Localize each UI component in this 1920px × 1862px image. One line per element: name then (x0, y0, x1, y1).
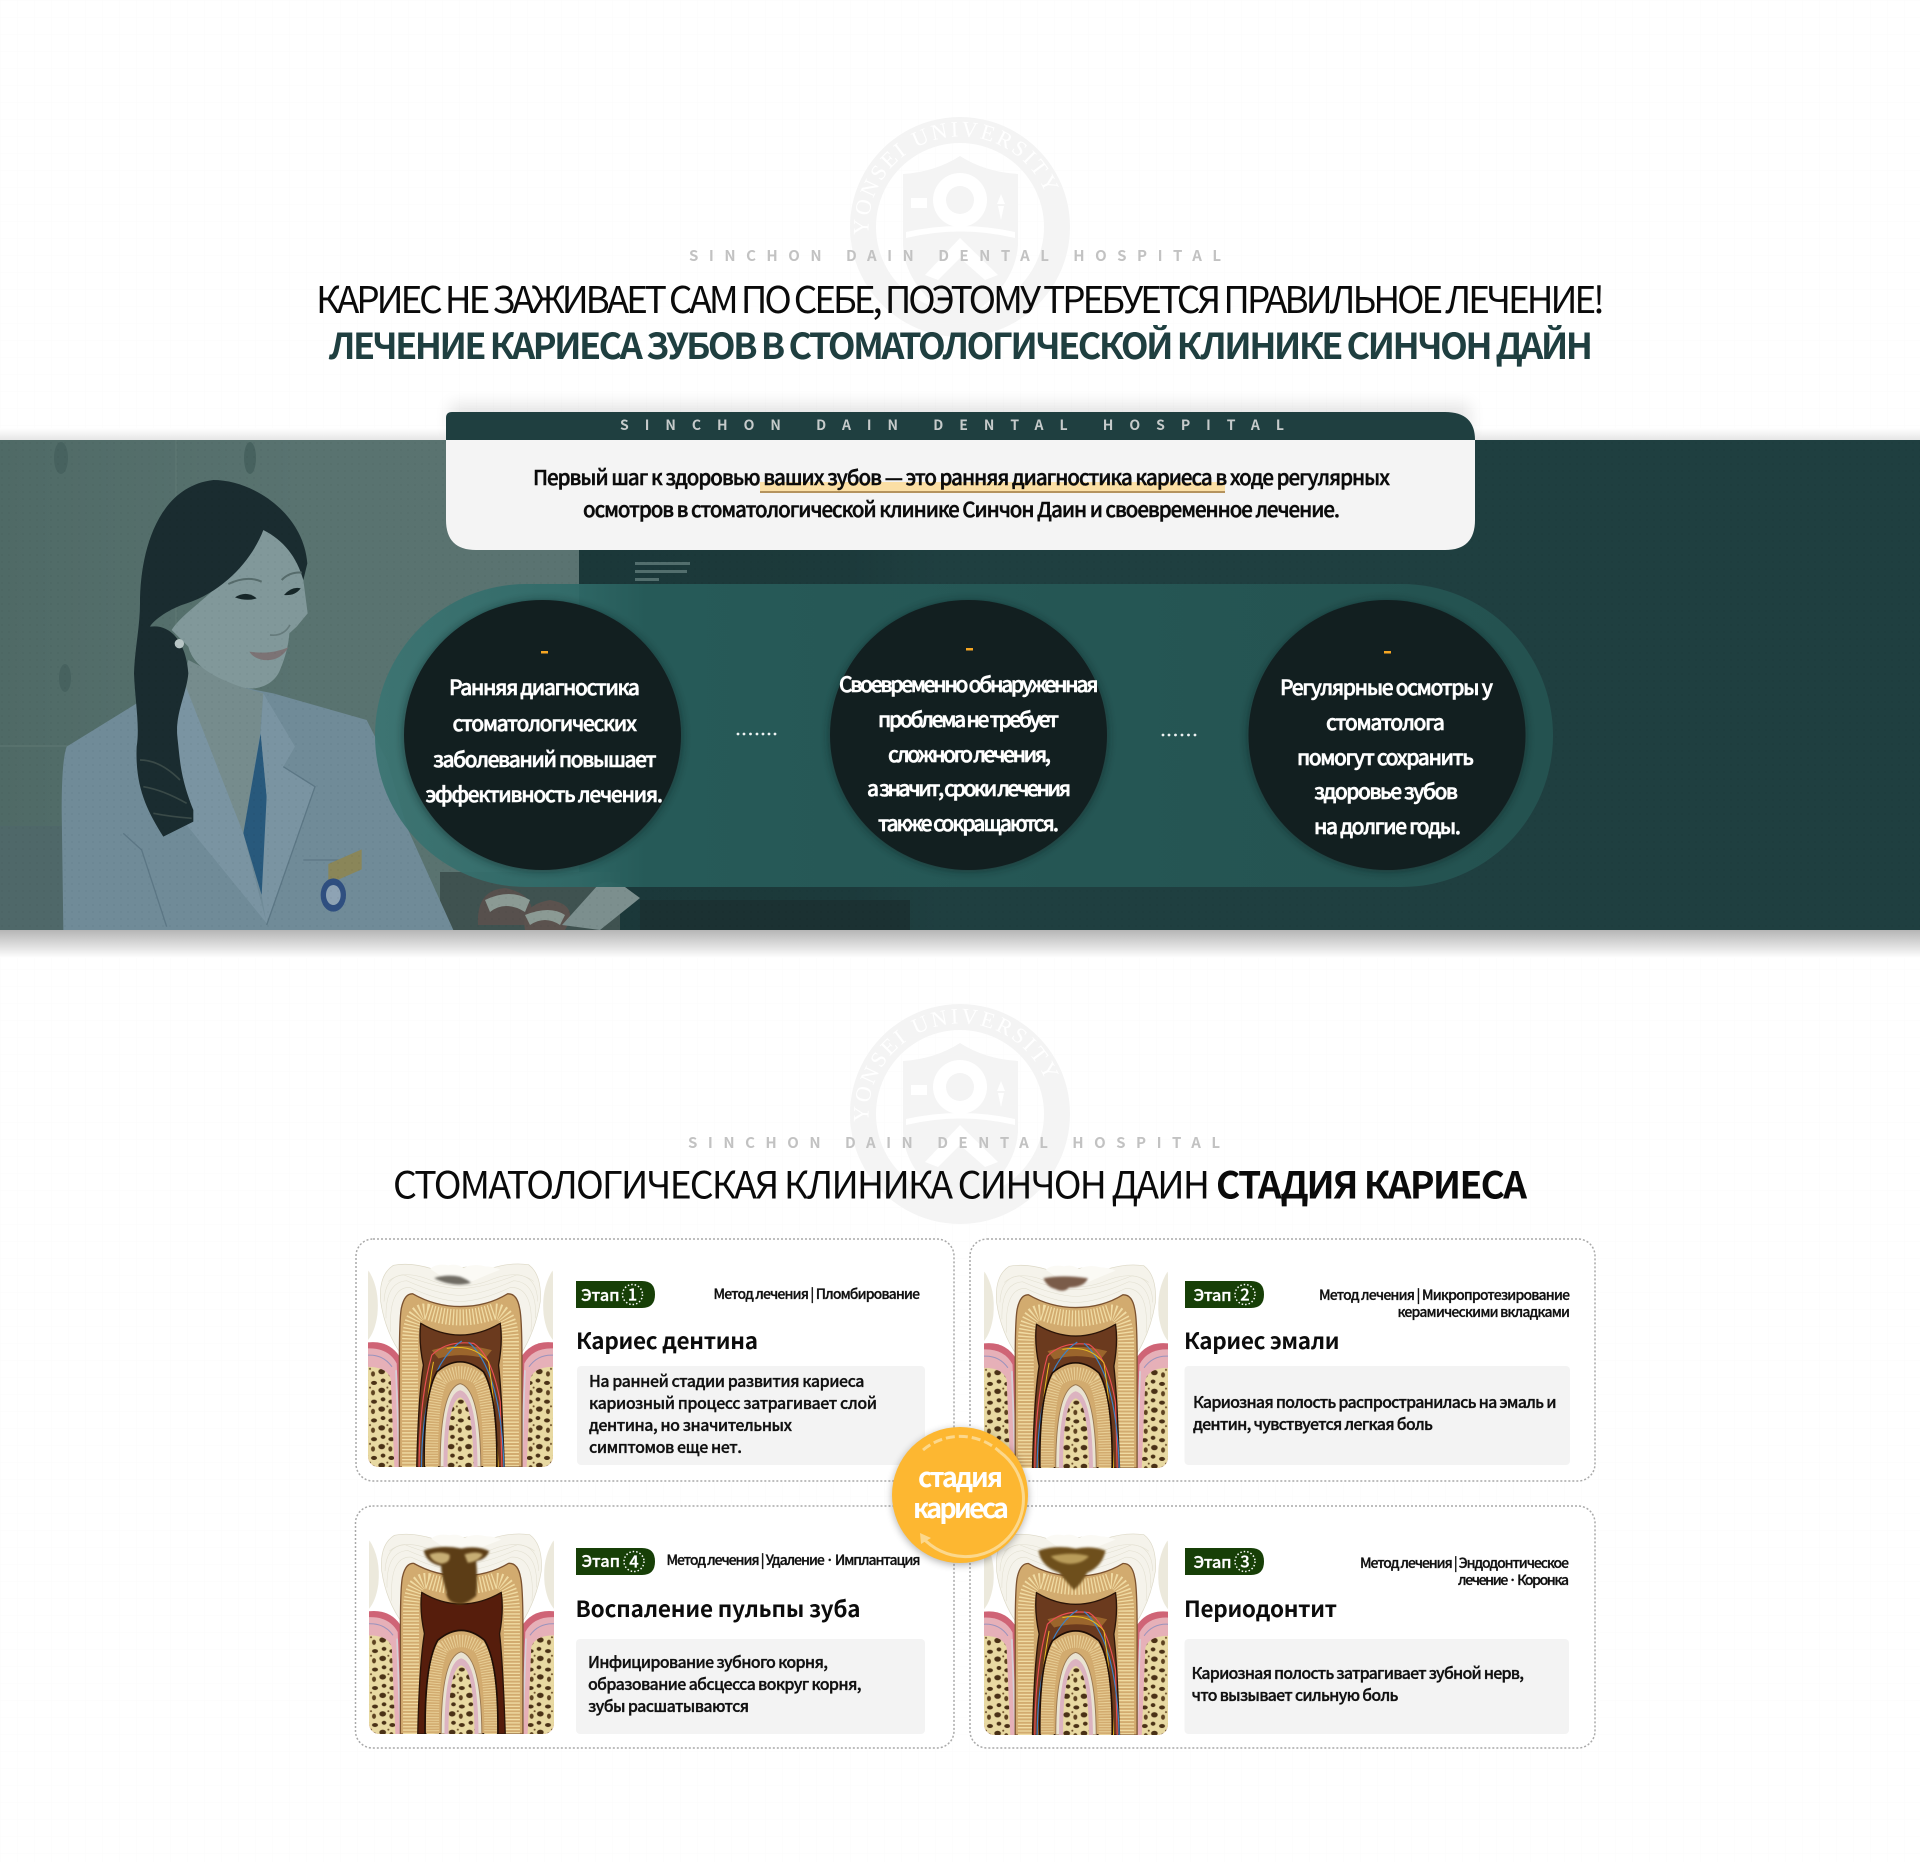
stage heading: Кариес дентина (576, 1324, 758, 1356)
tooth illustration stage 3 (984, 1534, 1168, 1735)
circle three: стоматолога (1326, 707, 1445, 737)
treatment method: Метод лечения | Эндодонтическое (1360, 1553, 1569, 1573)
stage badge: 1 (628, 1282, 637, 1306)
facial features (175, 573, 302, 660)
panel: stage 2 card (970, 1239, 1595, 1481)
treatment method: Метод лечения | Удаление · Имплантация (666, 1550, 920, 1570)
card text line two: осмотров в стоматологической клинике Синчон Даин и своевременное лечение. (583, 493, 1340, 523)
description (1184, 1639, 1569, 1734)
photo: monitor and desk (440, 548, 939, 930)
circle two: Своевременно обнаруженная (839, 669, 1098, 699)
banner shadows (0, 428, 1920, 958)
badge text: стадия (918, 1456, 1003, 1495)
watermark emblem: bottom (850, 1004, 1070, 1224)
section title: СТАДИЯ КАРИЕСА (1216, 1156, 1527, 1210)
stage badge: Этап (582, 1548, 620, 1572)
circle one: стоматологических (452, 708, 637, 738)
circle three (1247, 600, 1527, 872)
dotted connector two (1162, 734, 1196, 736)
tooth illustration stage 2 (984, 1264, 1168, 1468)
watermark emblem: top: YONSEI UNIVERSITY (854, 122, 1058, 234)
description: что вызывает сильную боль (1192, 1682, 1399, 1706)
treatment method: керамическими вкладками (1398, 1302, 1570, 1322)
lab coat (62, 677, 453, 930)
circle three: Регулярные осмотры у (1280, 672, 1494, 702)
circle one: эффективность лечения. (426, 779, 663, 809)
dotted connector one (737, 733, 776, 735)
badge text (913, 1456, 1009, 1526)
panel: intro card (446, 404, 1475, 550)
description (1184, 1366, 1570, 1465)
circle two: а значит, сроки лечения (867, 773, 1071, 803)
circle two: проблема не требует (878, 704, 1059, 734)
treatment method (1360, 1553, 1569, 1590)
circle two (828, 600, 1108, 872)
card header label: SINCHON DAIN DENTAL HOSPITAL (620, 415, 1284, 435)
tooth illustration stage 4 (369, 1534, 554, 1734)
circle one: Ранняя диагностика (449, 672, 640, 702)
description: дентина, но значительных (589, 1412, 793, 1436)
title: first line: КАРИЕС НЕ ЗАЖИВАЕТ САМ ПО СЕБЕ, ПОЭТОМУ ТРЕБУЕТСЯ ПРАВИЛЬНОЕ ЛЕЧЕНИЕ! (316, 270, 1605, 324)
photo: doctor (62, 480, 453, 930)
skin at neckline (180, 660, 263, 833)
panel: capsule behind circles (375, 584, 1553, 887)
description: Кариозная полость распространилась на эмаль и (1193, 1389, 1556, 1413)
circle two: сложного лечения, (888, 739, 1051, 769)
treatment method (1319, 1285, 1570, 1322)
circle three: на долгие годы. (1314, 811, 1461, 841)
watermark label: top: SINCHON DAIN DENTAL HOSPITAL (689, 245, 1221, 266)
watermark label: bottom: SINCHON DAIN DENTAL HOSPITAL (688, 1132, 1220, 1153)
stage badge (1185, 1281, 1264, 1308)
stage badge: Этап (581, 1282, 620, 1306)
name tag and logo (321, 849, 362, 912)
panel: stage 1 card (356, 1239, 954, 1481)
section title: СТОМАТОЛОГИЧЕСКАЯ КЛИНИКА СИНЧОН ДАИН (393, 1154, 1210, 1210)
stage badge (576, 1548, 655, 1575)
treatment method: Метод лечения | Пломбирование (714, 1284, 920, 1304)
face (172, 530, 308, 689)
panel: stage 3 card (970, 1506, 1595, 1748)
description: симптомов еще нет. (589, 1434, 742, 1458)
badge ring arrow (920, 1436, 1023, 1557)
circle one (402, 600, 682, 872)
description: Кариозная полость затрагивает зубной нерв, (1192, 1660, 1524, 1684)
description: зубы расшатываются (588, 1693, 749, 1717)
stage badge (1185, 1548, 1264, 1575)
description (577, 1366, 925, 1465)
treatment method: Метод лечения | Микропротезирование (1319, 1285, 1570, 1305)
stage heading: Кариес эмали (1184, 1324, 1340, 1356)
stage badge (576, 1281, 655, 1308)
stage heading: Воспаление пульпы зуба (576, 1592, 860, 1624)
treatment method: лечение · Коронка (1458, 1570, 1569, 1590)
circle one: заболеваний повышает (433, 744, 656, 774)
description: кариозный процесс затрагивает слой (589, 1390, 877, 1414)
circle three: помогут сохранить (1297, 742, 1474, 772)
photo: clinic wall (0, 440, 600, 930)
panel: stage 4 card (356, 1506, 954, 1748)
stage badge: Этап (1194, 1282, 1232, 1306)
badge text: кариеса (913, 1487, 1009, 1526)
description: образование абсцесса вокруг корня, (588, 1671, 862, 1695)
stage heading: Периодонтит (1184, 1592, 1337, 1624)
stage badge: Этап (1194, 1549, 1232, 1573)
description: На ранней стадии развития кариеса (589, 1368, 864, 1392)
hair (134, 480, 307, 837)
circle two: также сокращаются. (878, 808, 1059, 838)
tooth illustration stage 1 (368, 1264, 553, 1467)
stage badge: 4 (629, 1548, 639, 1572)
coat lapels (177, 688, 314, 922)
highlight under text (760, 482, 1225, 493)
center badge: stages of caries (892, 1427, 1028, 1565)
title: second line: ЛЕЧЕНИЕ КАРИЕСА ЗУБОВ В СТОМАТОЛОГИЧЕСКОЙ КЛИНИКЕ СИНЧОН ДАЙН (328, 318, 1593, 370)
stage badge: 2 (1240, 1282, 1250, 1306)
watermark emblem: top (850, 117, 1070, 336)
band texture (0, 440, 1920, 930)
description: Инфицирование зубного корня, (588, 1649, 828, 1673)
watermark emblem: bottom: YONSEI UNIVERSITY (854, 1009, 1058, 1122)
blue scrubs (243, 733, 267, 895)
circle three: здоровье зубов (1314, 776, 1458, 806)
description: дентин, чувствуется легкая боль (1193, 1411, 1433, 1435)
card text line one: Первый шаг к здоровью ваших зубов — это ранняя диагностика кариеса в ходе регулярных (533, 461, 1390, 491)
panel: dark green banner with doctor photo (0, 440, 1920, 930)
description (576, 1639, 925, 1734)
stage badge: 3 (1240, 1548, 1250, 1572)
